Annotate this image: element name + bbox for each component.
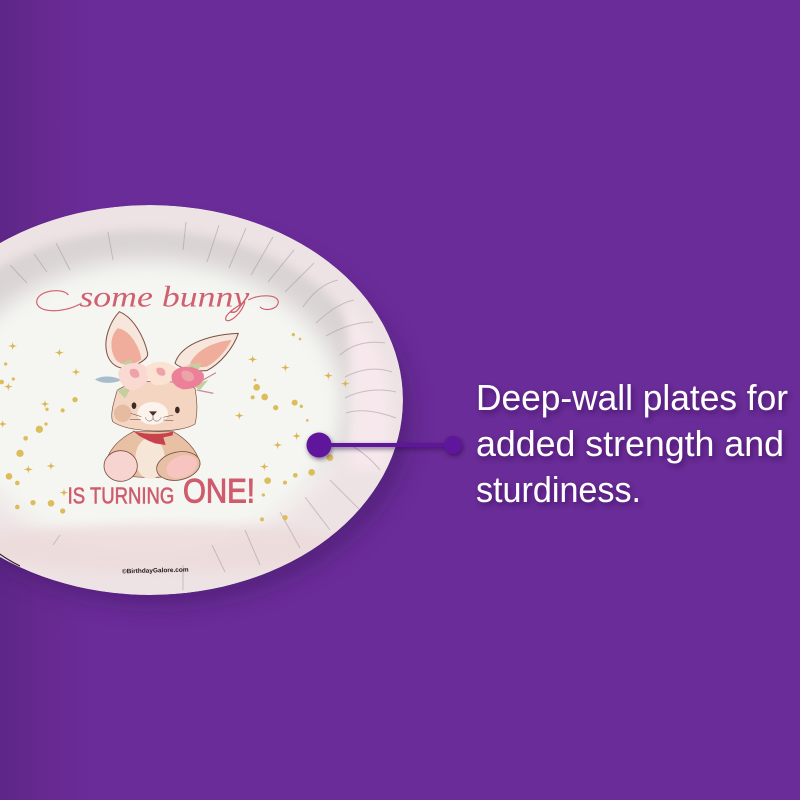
right ear inner bbox=[190, 340, 232, 367]
line 3: sturdiness. bbox=[476, 469, 641, 510]
rim right tint bbox=[345, 300, 391, 470]
right foot bbox=[154, 448, 203, 484]
callout connector bbox=[306, 432, 462, 458]
pink wall tint bbox=[0, 524, 355, 572]
nose bbox=[149, 411, 157, 416]
rim creases bbox=[10, 222, 396, 590]
rose right bbox=[172, 367, 204, 389]
rose left bbox=[118, 363, 149, 391]
head bbox=[112, 381, 197, 431]
inner wall shade bbox=[0, 228, 350, 455]
connector line bbox=[319, 443, 453, 447]
rim bottom dark edge bbox=[0, 552, 20, 566]
plate rim bbox=[0, 205, 403, 595]
left ear inner bbox=[111, 328, 141, 364]
flower crown bbox=[95, 359, 216, 398]
one: ONE! bbox=[183, 473, 255, 511]
mouth and whiskers bbox=[130, 413, 173, 421]
copyright text: ©BirthdayGalore.com bbox=[122, 566, 189, 575]
plate drop shadow bbox=[0, 228, 410, 604]
sprigs bbox=[197, 373, 216, 393]
gold sparkles bbox=[0, 341, 350, 497]
green leaves bbox=[117, 359, 208, 398]
right foot pad bbox=[163, 451, 200, 483]
left eye bbox=[132, 402, 136, 409]
muzzle bbox=[137, 402, 168, 425]
blue leaves bbox=[95, 377, 122, 383]
gold dots bbox=[0, 333, 333, 521]
plate bbox=[0, 205, 403, 595]
script heading: some bunny bbox=[37, 282, 278, 321]
cheek shade bbox=[114, 405, 131, 422]
is turning: IS TURNING bbox=[68, 482, 174, 508]
right eye bbox=[175, 407, 180, 413]
rose centres bbox=[130, 368, 194, 381]
line 2: added strength and bbox=[476, 423, 784, 464]
callout text bbox=[476, 377, 788, 510]
script swashes bbox=[37, 291, 278, 321]
line 1: Deep-wall plates for bbox=[476, 377, 788, 418]
rose middle bbox=[146, 362, 177, 385]
text: is turning one bbox=[68, 473, 255, 511]
belly bbox=[135, 438, 165, 479]
left ear bbox=[106, 312, 148, 369]
plate centre bbox=[0, 260, 344, 552]
small callout dot bbox=[444, 436, 462, 454]
torso bbox=[105, 432, 200, 477]
script text: some bunny bbox=[79, 282, 251, 314]
bunny illustration bbox=[95, 312, 238, 484]
right ear bbox=[175, 333, 238, 371]
bow tie bbox=[132, 430, 173, 445]
plate artwork bbox=[0, 282, 350, 575]
large callout dot bbox=[306, 432, 332, 458]
left foot bbox=[104, 451, 137, 481]
